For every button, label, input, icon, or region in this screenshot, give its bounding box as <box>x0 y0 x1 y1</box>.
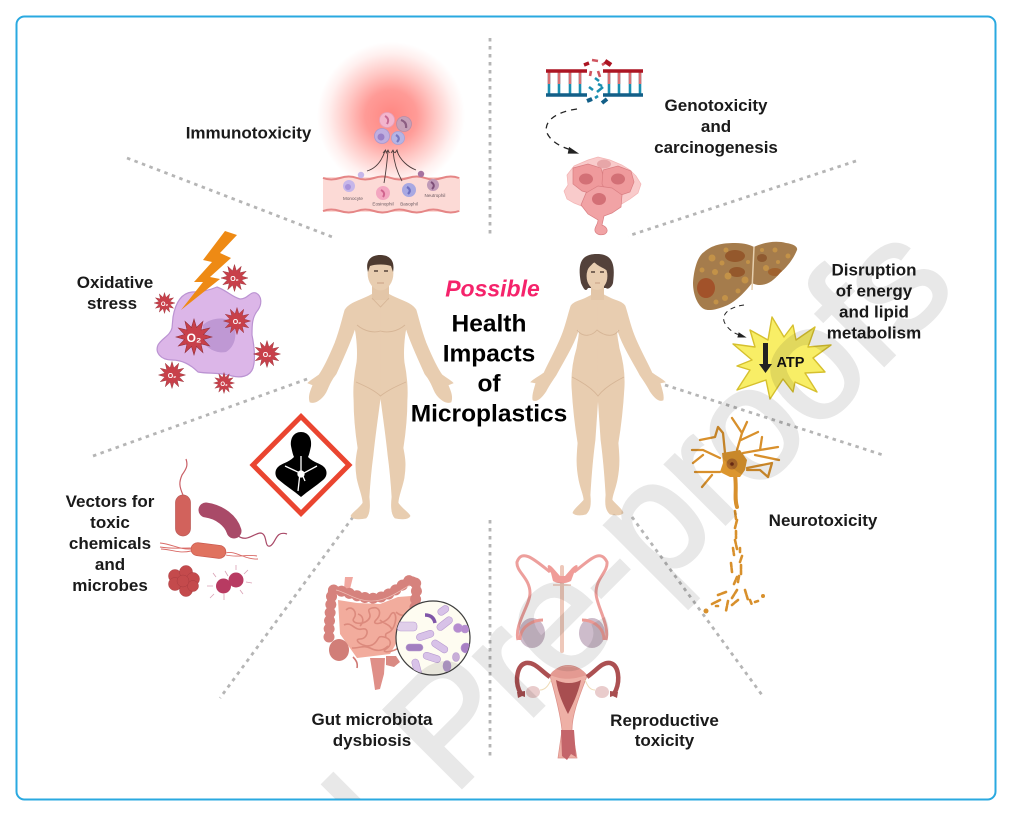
title: Health <box>452 310 526 338</box>
heading: immunotoxicity: Immunotoxicity <box>186 124 312 142</box>
heading: oxidative stress: stress <box>87 294 137 313</box>
panel: gut illustration <box>329 577 471 690</box>
arrows to inflammation <box>367 150 416 183</box>
cell labels: Neutrophil <box>425 193 445 198</box>
heading: reproductive toxicity: toxicity <box>635 731 695 750</box>
cell labels: Monocyte <box>343 196 363 201</box>
heading: disruption of energy and lipid metabolism: Disruption <box>832 260 916 280</box>
heading: vectors for toxic chemicals and microbes: microbes <box>72 576 148 595</box>
icon: spiky diplococcus <box>207 565 252 600</box>
heading: vectors for toxic chemicals and microbes: chemicals <box>69 534 151 553</box>
icon: cell <box>157 287 261 377</box>
title: Impacts <box>443 340 535 368</box>
cell labels: Basophil <box>400 202 418 206</box>
heading: genotoxicity: carcinogenesis <box>654 138 778 157</box>
icon: health hazard diamond <box>253 416 349 514</box>
heading: oxidative stress: Oxidative <box>77 273 153 292</box>
heading: neurotoxicity: Neurotoxicity <box>769 511 878 530</box>
heading: gut microbiota dysbiosis: Gut microbiota <box>312 710 433 729</box>
icon: neuron with fragmented axon <box>692 418 779 614</box>
icon: flagellated rod <box>160 542 258 559</box>
inflammation glow <box>317 42 465 190</box>
watermark: Pre-proofs <box>350 189 982 816</box>
heading: genotoxicity <box>654 96 778 157</box>
icon: curved bacterium <box>206 510 287 546</box>
icon: broken DNA <box>546 60 643 103</box>
heading: gut microbiota dysbiosis <box>312 710 433 750</box>
heading: disruption of energy and lipid metabolism: and lipid <box>839 302 909 322</box>
radical labels: O₂ <box>263 352 271 359</box>
radical labels: O₂ <box>161 302 168 308</box>
icon: down arrow <box>759 343 772 373</box>
radical labels: O₂ <box>168 373 176 380</box>
heading: gut microbiota dysbiosis: dysbiosis <box>333 731 411 750</box>
ATP label: ATP <box>777 355 805 371</box>
cell labels <box>343 193 445 206</box>
icon: female reproductive system <box>517 663 618 760</box>
blood vessel <box>323 176 460 212</box>
figure: male body <box>308 255 453 519</box>
icon: tumour cells <box>564 157 641 235</box>
title: of <box>477 370 501 398</box>
icon: superoxide radicals <box>154 264 280 394</box>
heading: genotoxicity: and <box>701 117 731 136</box>
heading: disruption of energy and lipid metabolism: of energy <box>836 282 913 300</box>
title: Possible <box>445 276 540 302</box>
radical labels: O₂ <box>187 331 201 345</box>
arrow: liver to ATP <box>724 305 745 337</box>
icon: damaged liver <box>693 242 797 310</box>
heading: vectors for toxic chemicals and microbes: Vectors for <box>66 492 155 511</box>
radical labels: O₂ <box>233 319 241 326</box>
panel: disruption of metabolism illustration <box>693 242 831 399</box>
title <box>411 276 567 428</box>
icon: coccus cluster <box>168 566 200 596</box>
radical labels: O₂ <box>220 382 228 388</box>
title: Microplastics <box>411 400 567 428</box>
heading: vectors for toxic chemicals and microbes: and <box>95 555 125 574</box>
panel: genotoxicity illustration <box>546 60 643 235</box>
radical labels: O₂ <box>230 276 239 283</box>
icon: lightning bolt <box>181 231 237 310</box>
heading: oxidative stress <box>77 273 153 313</box>
icon: intestines <box>329 577 417 690</box>
cell labels: Eosinophil <box>372 202 394 206</box>
migrating cells <box>343 112 439 200</box>
heading: reproductive toxicity: Reproductive <box>610 711 719 730</box>
panel: microbes <box>160 459 287 600</box>
heading: vectors for toxic chemicals and microbes: toxic <box>90 513 130 532</box>
panel: reproductive illustration <box>517 556 618 760</box>
icon: rod bacterium <box>176 459 190 536</box>
icon: magnified bacteria <box>396 601 471 676</box>
heading: disruption of energy and lipid metabolism: metabolism <box>827 324 921 342</box>
heading: genotoxicity: Genotoxicity <box>665 96 768 115</box>
panel: immunotoxicity illustration <box>317 42 465 212</box>
panel: oxidative stress illustration <box>154 231 280 394</box>
heading: disruption of energy and lipid metabolism <box>827 260 921 342</box>
icon: male reproductive system <box>517 556 607 651</box>
radical labels <box>161 276 271 388</box>
figure: female body <box>531 254 665 515</box>
heading: vectors for toxic chemicals and microbes <box>66 492 155 595</box>
icon: ATP burst <box>733 317 831 399</box>
heading: reproductive toxicity <box>610 711 719 750</box>
arrow: DNA damage to tumour <box>546 109 577 153</box>
